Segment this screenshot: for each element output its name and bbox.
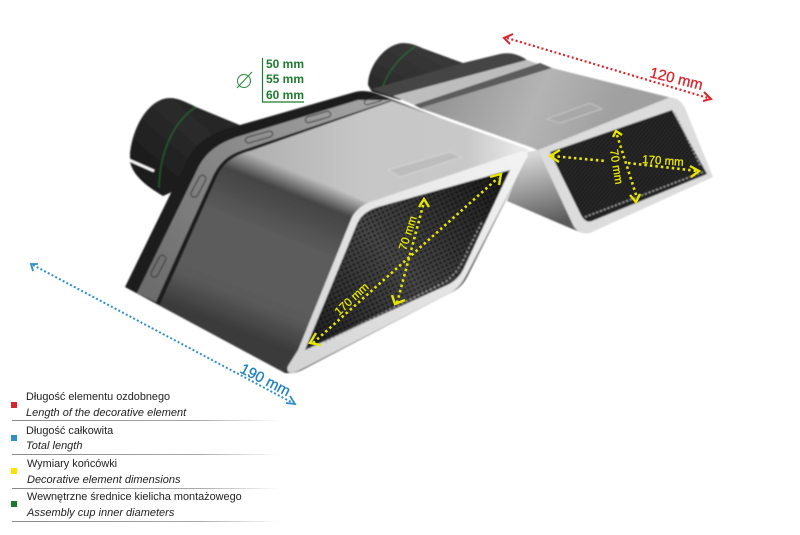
logo 1: [245, 130, 273, 144]
right dark stripe: [414, 63, 552, 109]
diameter symbol: [237, 72, 252, 88]
logo 3: [364, 96, 382, 105]
red dimension arrow: 120 mm: [504, 34, 711, 101]
legend row: red: [11, 391, 280, 421]
logo 4: [190, 174, 207, 198]
left side face shading: [160, 151, 370, 372]
legend row: red: Length of the decorative element: [26, 407, 187, 419]
legend row: yellow: Wymiary końcówki: [27, 458, 117, 470]
red dimension arrow: 120 mm: 120 mm: [648, 64, 705, 94]
right pipe: [368, 43, 480, 100]
right inner side: [507, 150, 580, 232]
right logo: [547, 103, 602, 123]
right mouth stitch: [585, 113, 703, 217]
dimension: right tip 170 mm: 170 mm: [642, 154, 684, 169]
left mouth: [305, 170, 510, 350]
left pipe: [130, 98, 242, 196]
legend row: blue: Total length: [26, 440, 82, 452]
diameter callout: [237, 57, 304, 102]
pipe slit: [129, 160, 154, 171]
left pipe green mark: [159, 107, 196, 187]
right body top: [420, 68, 685, 152]
dimension: right tip 70 mm: [607, 131, 640, 202]
left top and side face base: [160, 101, 530, 372]
legend: [11, 391, 280, 522]
blue dimension arrow: 190 mm: [31, 264, 295, 404]
left logos: [150, 96, 382, 278]
left exhaust tip: [125, 91, 530, 373]
diameter bracket: [262, 58, 304, 102]
dimension: left tip 170 mm: [310, 174, 501, 345]
top logo: [388, 152, 462, 177]
legend row: red: Długość elementu ozdobnego: [26, 391, 170, 403]
right exhaust tip: [368, 43, 713, 234]
diameter values: 55 mm: [266, 72, 304, 86]
left light band: [137, 100, 392, 302]
dimension: right tip 170 mm: [550, 150, 699, 177]
legend row: green: Wewnętrzne średnice kielicha montażowego: [27, 491, 242, 503]
blue dimension arrow: 190 mm: 190 mm: [237, 360, 293, 400]
diameter values: [266, 57, 304, 102]
left body outline: [125, 91, 527, 373]
left rim: [287, 151, 528, 373]
right rim: [538, 98, 713, 234]
right light band: [393, 60, 541, 106]
right mouth carbon: [550, 110, 707, 222]
dimension: left tip 170 mm: 170 mm: [333, 281, 371, 318]
legend row: blue: Długość całkowita: [26, 425, 114, 437]
legend row: yellow: Decorative element dimensions: [27, 474, 181, 486]
dimension: left tip 70 mm: 70 mm: [397, 215, 420, 252]
logo 5: [150, 254, 167, 278]
legend row: yellow: [11, 458, 280, 489]
left mouth perforation: [305, 170, 510, 350]
logo 2: [305, 111, 331, 123]
left mouth stitch: [325, 222, 482, 342]
diameter values: 50 mm: [266, 57, 304, 71]
right dark top strip: [372, 53, 527, 97]
legend row: blue: [11, 425, 280, 455]
right pipe green mark: [383, 47, 415, 86]
legend row: green: Assembly cup inner diameters: [26, 507, 175, 519]
diameter values: 60 mm: [266, 88, 304, 102]
dimension: left tip 70 mm: [392, 199, 429, 304]
legend row: green: [11, 491, 280, 522]
dimension: right tip 70 mm: 70 mm: [607, 149, 624, 185]
